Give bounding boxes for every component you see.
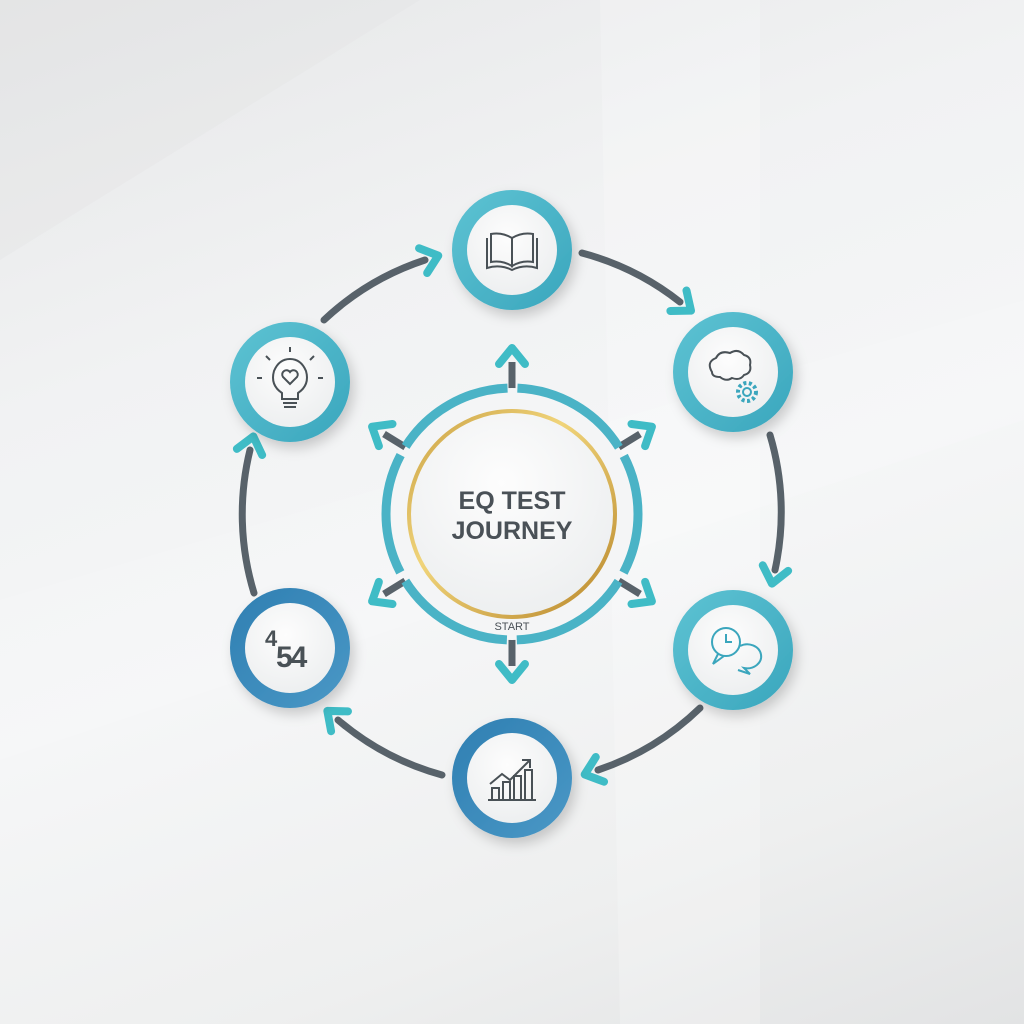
start label: START bbox=[494, 621, 530, 633]
title: EQ TEST bbox=[459, 487, 565, 515]
node: chat clock (lower right) bbox=[673, 590, 793, 710]
cycle arrows bbox=[242, 253, 781, 775]
center hub bbox=[386, 388, 638, 640]
node: bulb heart (upper left) bbox=[230, 322, 350, 442]
node: 454 (lower left): 54 bbox=[276, 641, 308, 674]
node: chart (bottom) bbox=[452, 718, 572, 838]
node: brain gear (upper right) bbox=[673, 312, 793, 432]
center hub: JOURNEY bbox=[452, 517, 573, 545]
node: 454 (lower left) bbox=[230, 588, 350, 708]
spokes from center bbox=[384, 362, 640, 666]
node: book (top) bbox=[452, 190, 572, 310]
node: 454 (lower left): 4 bbox=[265, 626, 278, 651]
